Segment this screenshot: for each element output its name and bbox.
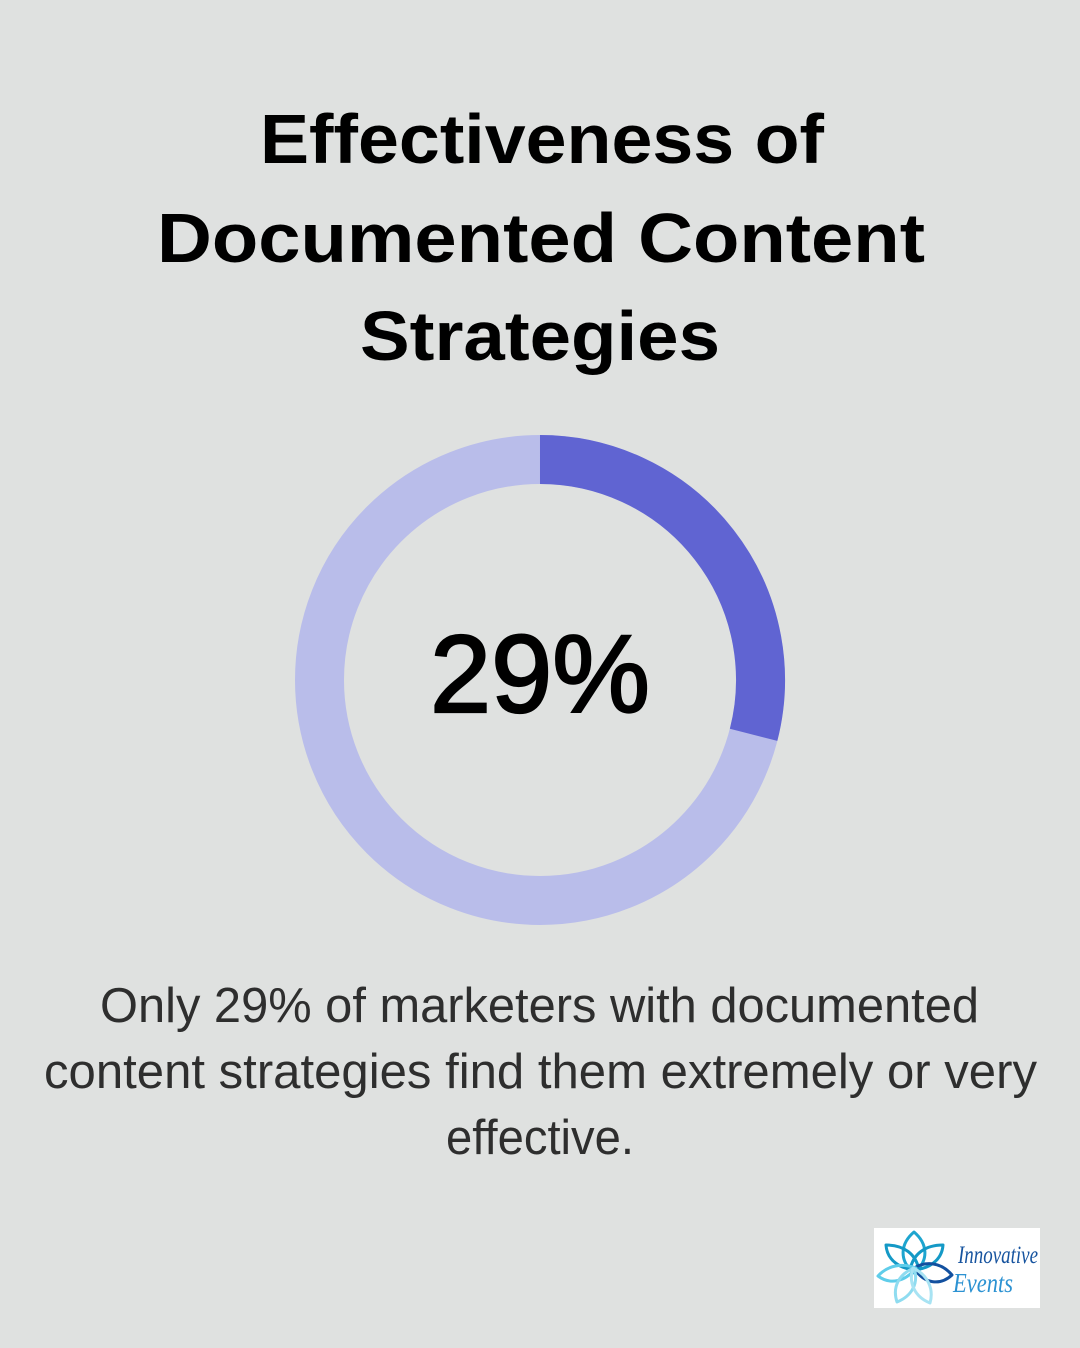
logo wordmark: Events (952, 1268, 1013, 1298)
title: Strategies (360, 297, 720, 375)
description text: Only 29% of marketers with documented (100, 979, 979, 1033)
description text: effective. (446, 1111, 634, 1165)
donut value arc (540, 460, 761, 735)
logo: Innovative Events (874, 1228, 1040, 1308)
logo wordmark: Innovative (957, 1242, 1038, 1269)
title (157, 100, 925, 375)
title: Documented Content (157, 199, 925, 277)
center value: 29% (430, 613, 650, 736)
title: Effectiveness of (260, 100, 825, 178)
description text: content strategies find them extremely or very (44, 1045, 1037, 1099)
donut chart: 29% (320, 460, 761, 900)
donut track (320, 460, 760, 900)
logo wordmark (952, 1242, 1038, 1298)
description text (44, 979, 1037, 1165)
icon: lotus flower (878, 1232, 952, 1303)
